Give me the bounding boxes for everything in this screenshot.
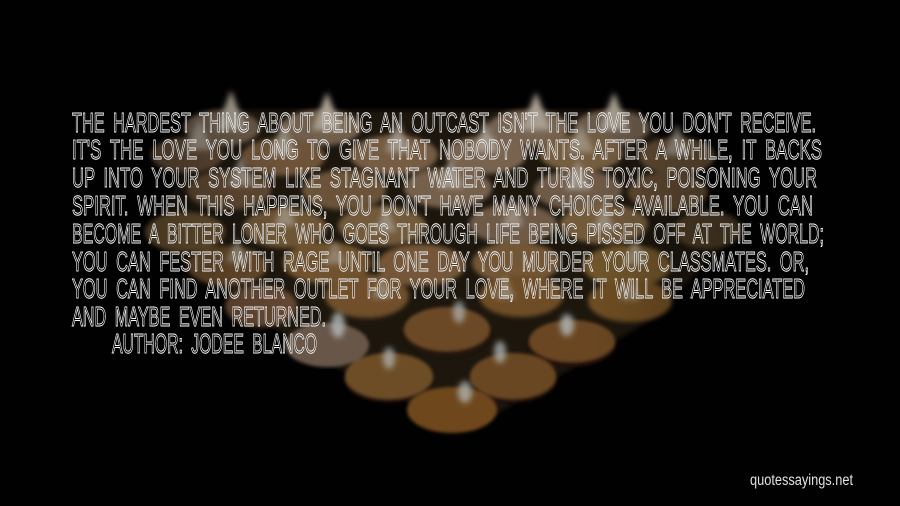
watermark: quotessayings.net [750,472,854,489]
candle flames [186,90,690,300]
lower candle discs [285,307,616,433]
quote text [72,107,824,359]
candle wicks [331,301,574,403]
dark tray behind candles [150,110,730,430]
line 8: AND MAYBE EVEN RETURNED. [72,301,326,332]
side vignette [130,85,750,445]
background: candle group [130,85,750,445]
upper candle discs [145,110,742,327]
author: AUTHOR: JODEE BLANCO [112,328,317,359]
